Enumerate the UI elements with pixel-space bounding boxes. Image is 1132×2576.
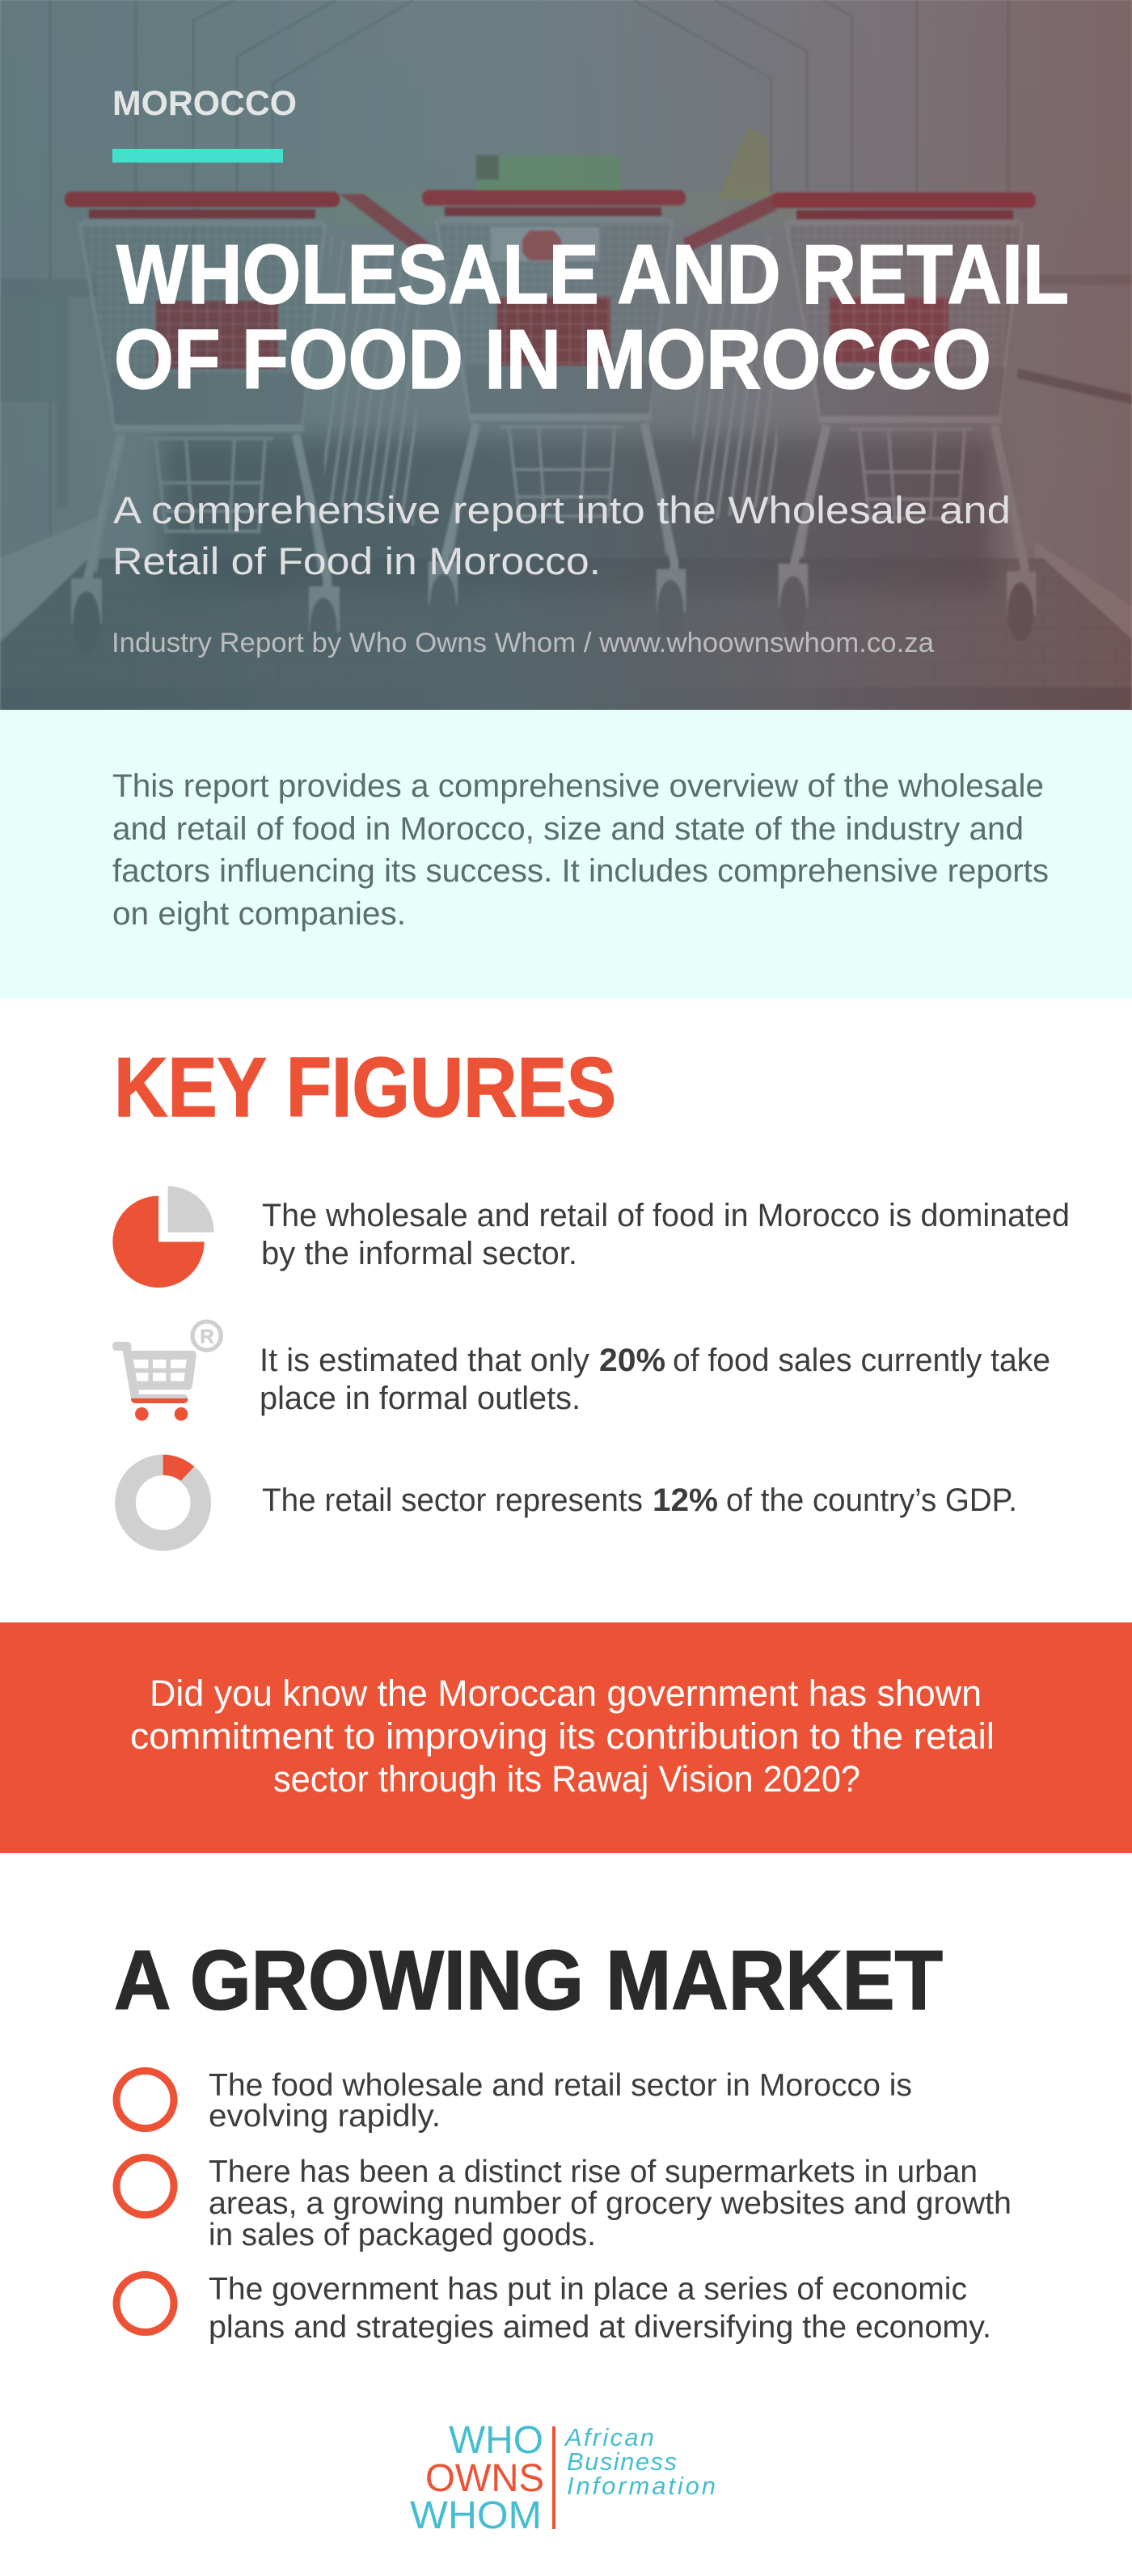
- subtitle: [112, 489, 1011, 582]
- logo: who owns whom: [410, 2419, 716, 2537]
- country label: MOROCCO: [112, 84, 297, 123]
- key figure: informal sector: [261, 1198, 1070, 1271]
- bullet marker 2: [116, 2158, 174, 2214]
- intro text: [112, 768, 1049, 932]
- icon: shopping cart with registered mark: R: [200, 1326, 214, 1348]
- bullet text 3: The government has put in place a series of economic: [209, 2272, 967, 2307]
- heading: key figures: KEY FIGURES: [114, 1041, 616, 1135]
- callout text: commitment to improving its contribution to the retail: [130, 1715, 995, 1757]
- main title: [114, 228, 1069, 407]
- bullet text 2: There has been a distinct rise of supermarkets in urban: [209, 2155, 978, 2189]
- key figure: share of GDP: The retail sector represents: [262, 1483, 643, 1518]
- key figure: share of GDP: of the country’s GDP.: [726, 1483, 1017, 1518]
- key figure: formal outlets: It is estimated that only: [260, 1343, 589, 1378]
- callout text: Did you know the Moroccan government has shown: [150, 1673, 982, 1714]
- bullet text 1: [209, 2068, 912, 2134]
- logo: who owns whom: WHOM: [410, 2494, 542, 2537]
- logo: who owns whom: Business: [567, 2447, 677, 2476]
- hero background photo: shopping carts in a tunnel: [0, 0, 1132, 710]
- heading: a growing market: A GROWING MARKET: [114, 1934, 943, 2028]
- bullet marker 1: [116, 2071, 174, 2129]
- intro text: This report provides a comprehensive overview of the wholesale: [112, 768, 1044, 804]
- dark shadow beneath carts: [162, 437, 995, 590]
- icon: donut chart: [125, 1455, 201, 1541]
- icon: pie chart: [112, 1186, 214, 1288]
- bullet text 3: [209, 2272, 991, 2345]
- logo: who owns whom: WHO: [449, 2419, 543, 2462]
- icon: shopping cart with registered mark: [112, 1322, 221, 1421]
- intro text: and retail of food in Morocco, size and state of the industry and: [112, 811, 1024, 847]
- bullet text 2: [209, 2155, 1012, 2252]
- hero panel: [0, 0, 1132, 710]
- bullet text 2: in sales of packaged goods.: [209, 2218, 596, 2252]
- bullet text 2: areas, a growing number of grocery websites and growth: [209, 2186, 1012, 2221]
- logo: who owns whom: Information: [567, 2472, 716, 2500]
- logo: who owns whom: African: [564, 2423, 654, 2451]
- key figure: share of GDP: [262, 1483, 1017, 1518]
- bullet text 3: plans and strategies aimed at diversifying the economy.: [209, 2310, 991, 2345]
- bullet marker 3: [116, 2274, 174, 2333]
- stacked carts behind: [323, 235, 420, 526]
- bullet text 1: evolving rapidly.: [209, 2099, 441, 2134]
- key figure: share of GDP: 12%: [653, 1483, 718, 1518]
- key figure: formal outlets: 20%: [599, 1343, 665, 1378]
- callout text: [130, 1673, 995, 1800]
- photo accents: sign, tree, red cart handles: [65, 128, 1036, 369]
- key figure: formal outlets: [260, 1343, 1050, 1416]
- bullet text 1: The food wholesale and retail sector in Morocco is: [209, 2068, 912, 2103]
- hero colour overlay: [0, 0, 1132, 710]
- report credit: Industry Report by Who Owns Whom / www.whoownswhom.co.za: [112, 628, 934, 658]
- key figure: formal outlets: place in formal outlets.: [260, 1381, 581, 1416]
- intro text: factors influencing its success. It includes comprehensive reports: [112, 853, 1049, 889]
- subtitle: A comprehensive report into the Wholesale and: [113, 489, 1011, 531]
- callout text: sector through its Rawaj Vision 2020?: [273, 1758, 860, 1800]
- intro text: on eight companies.: [112, 896, 406, 932]
- callout: did you know: [0, 1622, 1132, 1853]
- logo: who owns whom: OWNS: [425, 2457, 544, 2500]
- key figure: informal sector: by the informal sector.: [261, 1236, 577, 1271]
- main title: OF FOOD IN MOROCCO: [114, 313, 991, 407]
- subtitle: Retail of Food in Morocco.: [112, 539, 601, 582]
- panel: introduction: [0, 710, 1132, 998]
- key figure: formal outlets: of food sales currently take: [673, 1343, 1050, 1378]
- teal accent bar: [112, 149, 283, 163]
- key figure: informal sector: The wholesale and retail of food in Morocco is dominated: [262, 1198, 1070, 1233]
